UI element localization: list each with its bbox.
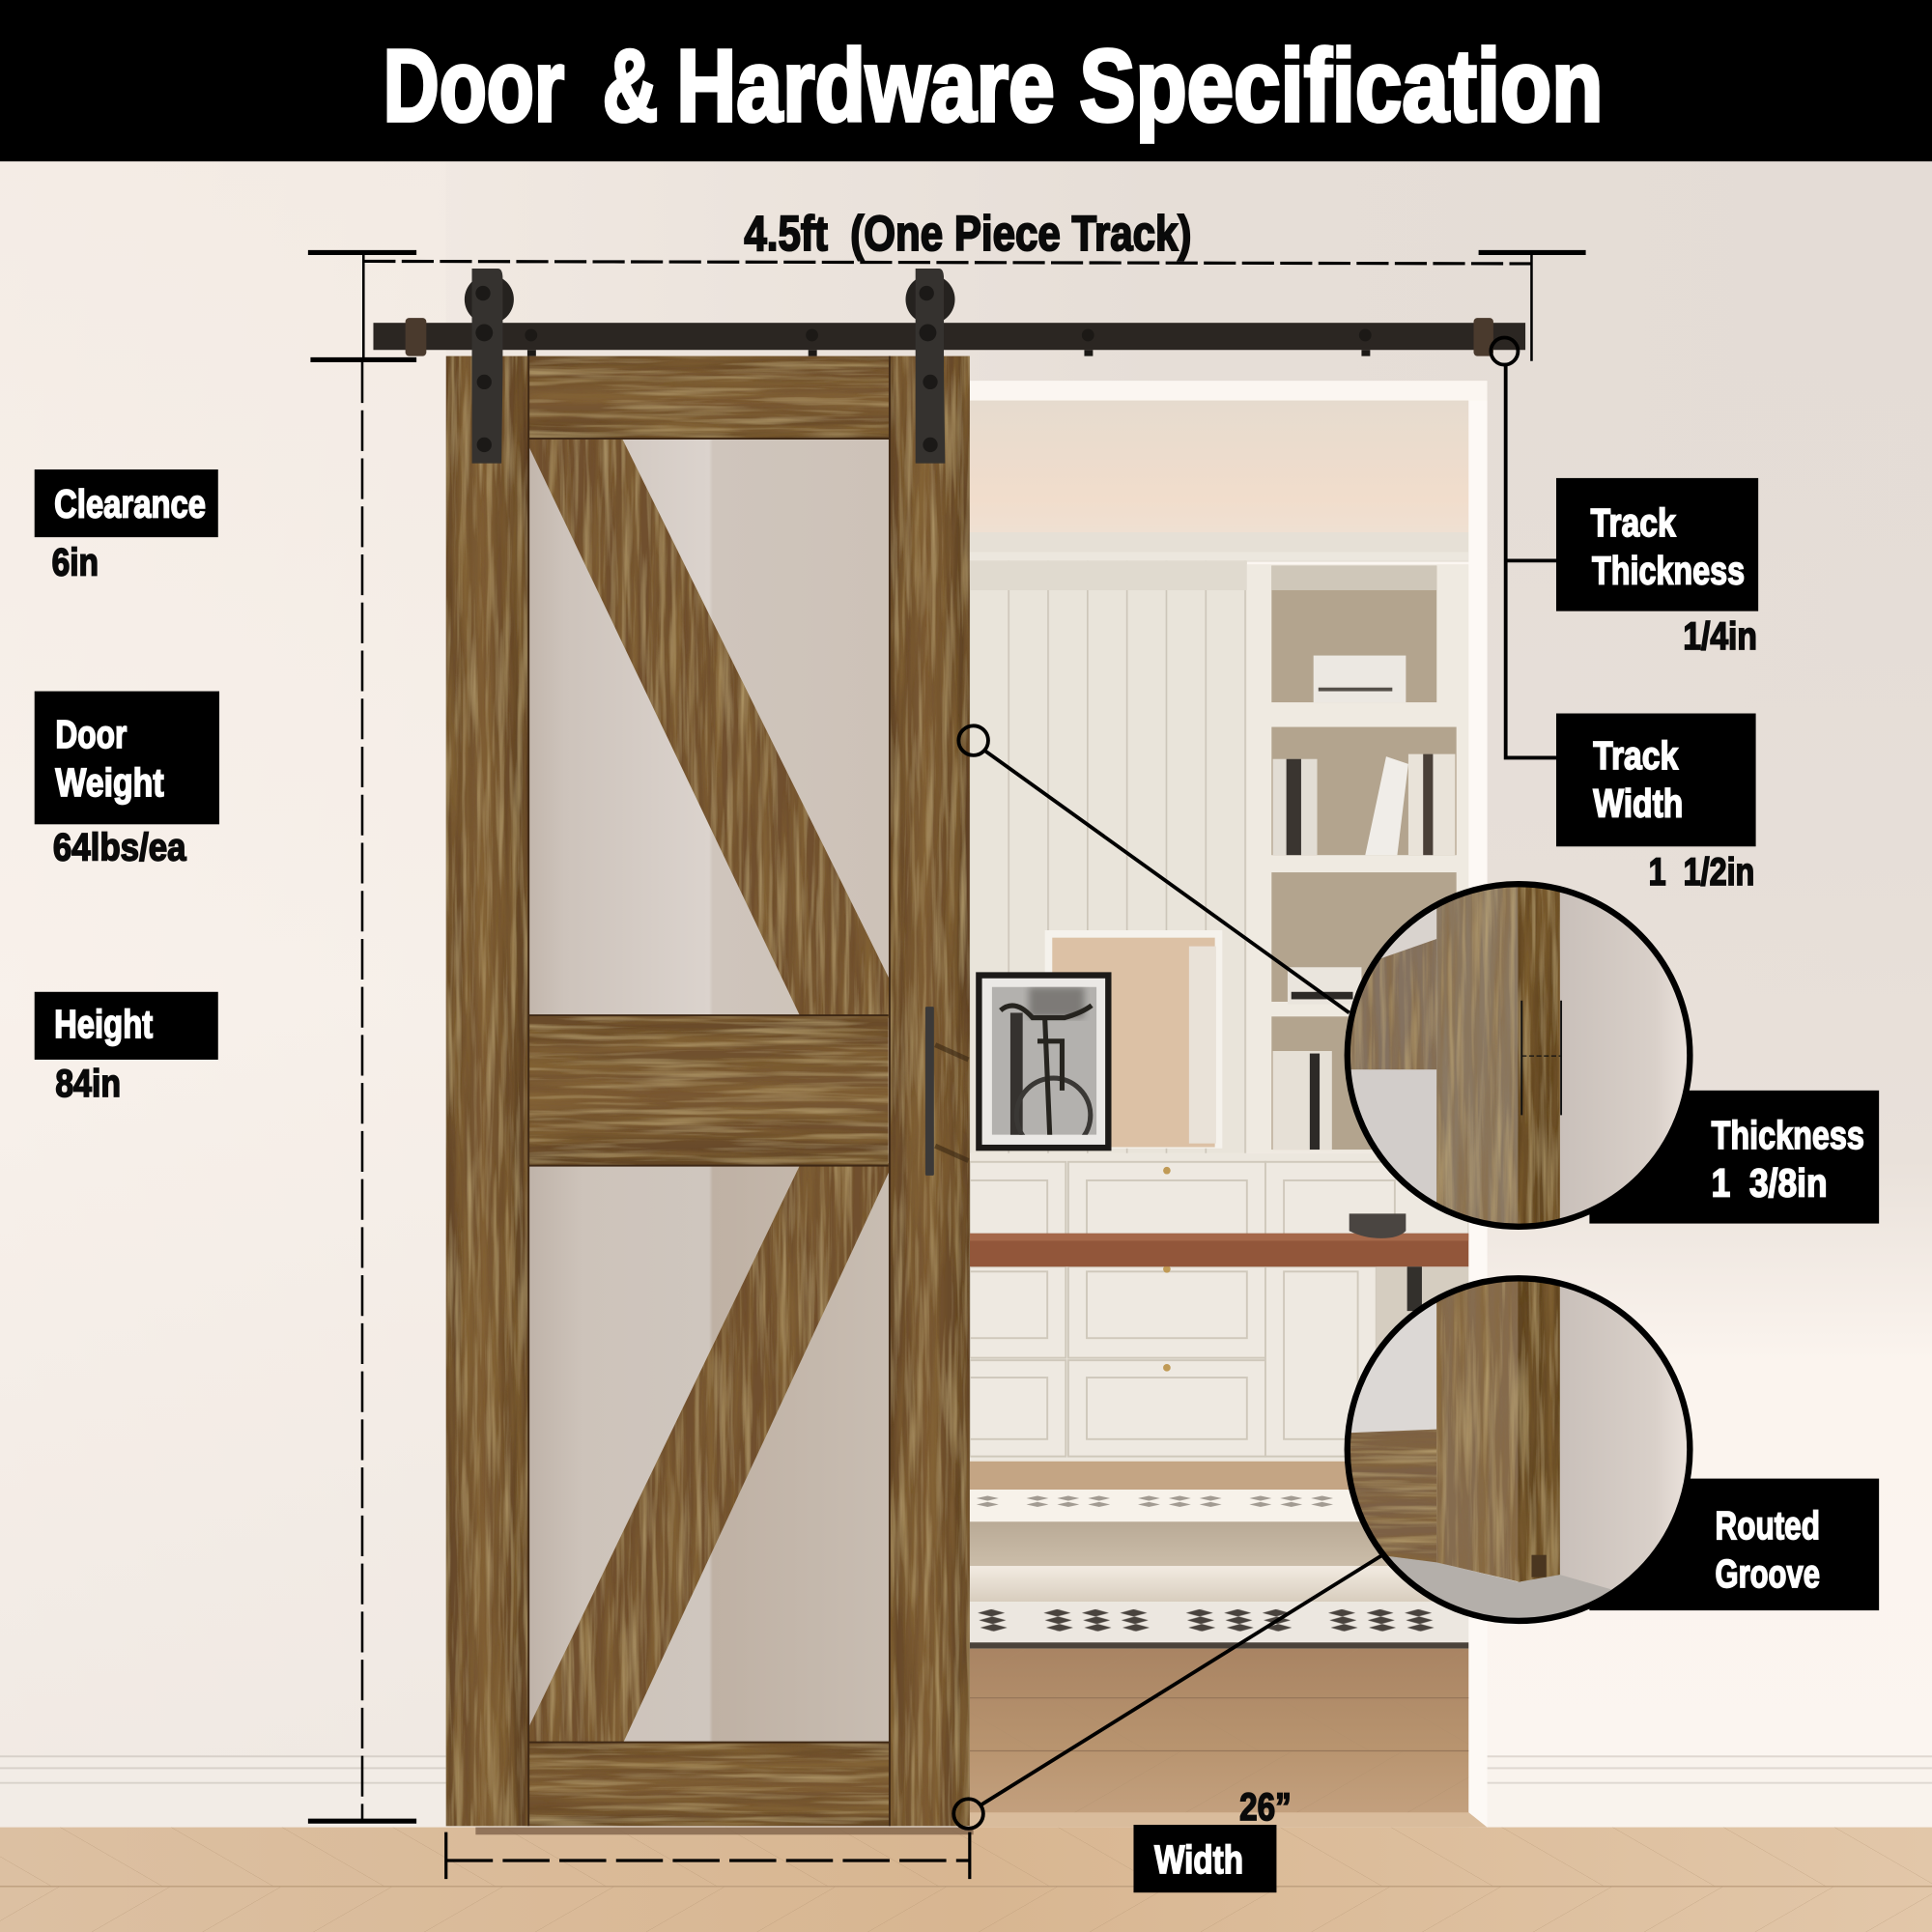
ceiling — [970, 401, 1468, 532]
label: track thickness — [1556, 478, 1758, 611]
right hanger — [906, 269, 955, 464]
doorway opening and interior room — [970, 381, 1488, 1828]
left stopper — [406, 318, 426, 356]
dimension: track length — [308, 252, 1586, 361]
label: thickness: 1 3/8in — [1712, 1161, 1828, 1206]
dimension: door width — [446, 1833, 970, 1879]
label: door weight — [35, 692, 219, 824]
title bar — [0, 0, 1932, 161]
barn door — [446, 356, 970, 1826]
label: routed groove — [1716, 1503, 1820, 1596]
label: height: Height — [54, 1002, 153, 1046]
label: routed groove: Groove — [1716, 1551, 1820, 1596]
label: track thickness: Track — [1591, 500, 1676, 545]
title: Door — [384, 29, 564, 143]
value: clearance: 6in — [52, 542, 99, 584]
label: door weight: Weight — [55, 760, 164, 805]
title: Specification — [1079, 29, 1603, 143]
track bolts — [525, 329, 1372, 356]
abstract painting — [1045, 930, 1222, 1149]
detail circle: routed groove — [1346, 1276, 1695, 1627]
door handle — [925, 1007, 969, 1176]
bookshelf — [1247, 564, 1468, 1153]
upper diagonal brace — [528, 439, 890, 1018]
label: track width: Width — [1593, 781, 1683, 826]
track length label: 4.5ft (One Piece Track) — [744, 206, 1191, 261]
value: height: 84in — [55, 1063, 121, 1105]
label: thickness — [1712, 1113, 1864, 1206]
bottom rail — [528, 1743, 890, 1826]
top rail — [528, 356, 890, 439]
callout box: thickness — [1589, 1091, 1879, 1224]
label: height — [35, 992, 218, 1060]
leader: thickness — [958, 725, 1350, 1012]
label: width: Width — [1154, 1837, 1243, 1882]
label: door weight: Door — [55, 712, 127, 756]
label: track thickness: Thickness — [1592, 549, 1745, 593]
callout box: routed groove — [1589, 1479, 1879, 1610]
title: Hardware — [676, 29, 1055, 143]
track bar — [373, 323, 1525, 350]
rugs and floor — [970, 1461, 1349, 1490]
title: & — [603, 29, 658, 143]
left hanger — [465, 269, 514, 464]
label: clearance: Clearance — [54, 482, 206, 526]
track rail and hangers — [373, 269, 1525, 464]
label: clearance — [35, 469, 218, 537]
right stopper — [1474, 318, 1493, 356]
door jamb — [1468, 401, 1488, 1828]
desk top — [970, 1234, 1468, 1266]
label: thickness: Thickness — [1712, 1113, 1864, 1157]
detail circle: door thickness — [1346, 882, 1695, 1230]
label: width — [1133, 1825, 1276, 1892]
value: track thickness: 1/4in — [1683, 615, 1757, 658]
bicycle photo frame — [976, 972, 1112, 1151]
value: door weight: 64lbs/ea — [53, 826, 186, 868]
dimension: clearance — [310, 252, 416, 359]
value: track width: 1 1/2in — [1649, 851, 1754, 894]
title — [384, 29, 1603, 143]
left stile — [446, 356, 528, 1826]
middle rail — [528, 1015, 889, 1166]
cabinets — [970, 1153, 1379, 1461]
glass panels — [528, 439, 890, 1745]
door floor shadow — [475, 1828, 974, 1834]
label: routed groove: Routed — [1716, 1503, 1820, 1548]
label: track width: Track — [1593, 733, 1678, 778]
leader: routed groove — [953, 1555, 1382, 1829]
floor threshold — [970, 1812, 1488, 1828]
leader: track details — [1491, 337, 1556, 757]
dimension: door height — [308, 362, 416, 1821]
lower diagonal brace — [528, 1163, 890, 1745]
right stile — [890, 356, 970, 1826]
value: width: 26” — [1239, 1786, 1292, 1829]
label: track width — [1556, 714, 1756, 846]
